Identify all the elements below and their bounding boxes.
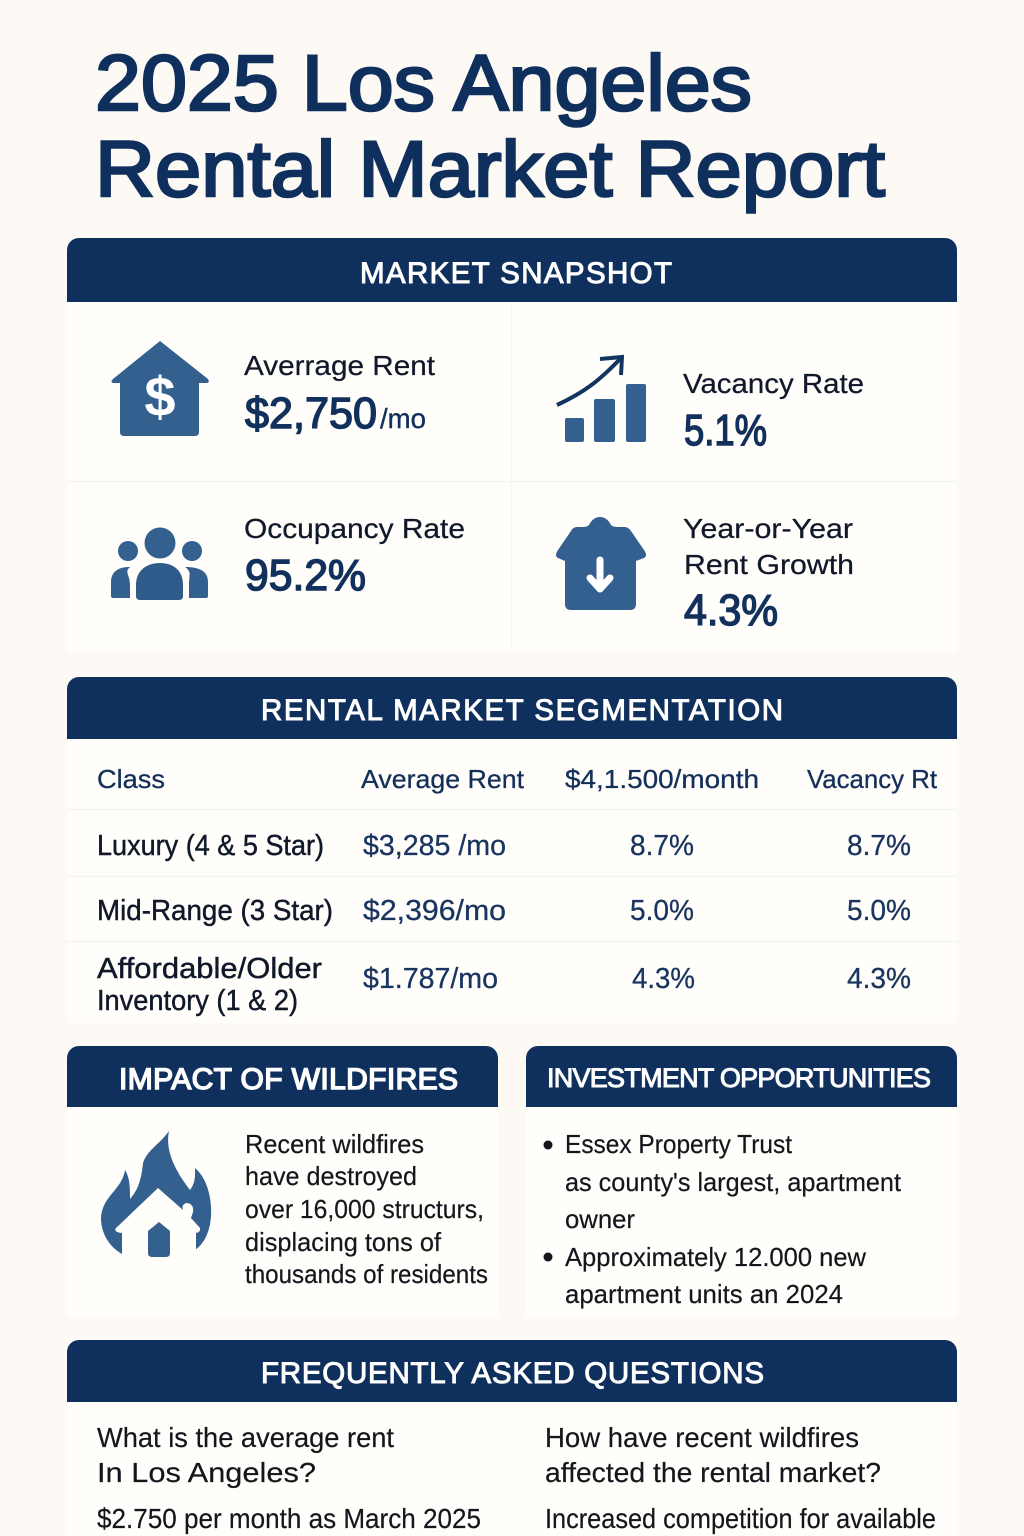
- vacancy rate stat: [683, 368, 864, 455]
- heading: investment opportunities: INVESTMENT OPPORTUNITIES: [547, 1063, 931, 1093]
- table row: mid-range: Mid-Range (3 Star): [97, 895, 333, 927]
- vacancy rate stat: Vacancy Rate: [683, 368, 864, 399]
- faq: average rent: $2.750 per month as March 2025: [97, 1503, 481, 1534]
- heading: frequently asked questions: [67, 1340, 957, 1402]
- heading: investment opportunities: [526, 1046, 957, 1107]
- table row: luxury: [97, 830, 911, 862]
- table row: mid-range: 5.0%: [847, 895, 911, 927]
- bullet: new apartment units: apartment units an 2024: [565, 1279, 843, 1309]
- table row: affordable: [97, 953, 911, 1017]
- table header row: $4,1.500/month: [565, 764, 759, 794]
- wildfire text block: over 16,000 structurs,: [245, 1194, 484, 1224]
- heading: impact of wildfires: [67, 1046, 498, 1107]
- average rent stat: [244, 350, 435, 438]
- icon: house on fire: [101, 1131, 211, 1258]
- faq: average rent: What is the average rent: [97, 1422, 394, 1453]
- bullet: new apartment units: Approximately 12.000 new: [565, 1242, 866, 1272]
- faq: wildfires effect: [545, 1422, 936, 1534]
- icon: group of people: [111, 528, 208, 600]
- table row: mid-range: $2,396/mo: [363, 895, 506, 927]
- heading: impact of wildfires: IMPACT OF WILDFIRES: [119, 1063, 458, 1096]
- icon: house with dollar sign: $: [144, 365, 176, 428]
- table row: affordable: $1.787/mo: [363, 963, 498, 995]
- year-over-year rent growth stat: [683, 513, 854, 635]
- bullet: new apartment units: [544, 1242, 866, 1309]
- panel: market snapshot: [67, 238, 957, 652]
- table row: affordable: 4.3%: [847, 963, 911, 995]
- year-over-year rent growth stat: Year-or-Year: [683, 513, 853, 544]
- table row: affordable: Inventory (1 & 2): [97, 985, 298, 1017]
- bullet: essex property trust: as county's largest, apartment: [565, 1167, 902, 1197]
- bullet: essex property trust: [544, 1129, 902, 1234]
- table header row: [97, 764, 938, 794]
- faq: wildfires effect: How have recent wildfires: [545, 1422, 859, 1453]
- occupancy rate stat: [244, 513, 465, 600]
- panel: frequently asked questions: [67, 1340, 957, 1536]
- icon: house with dollar sign: [112, 341, 209, 436]
- table row: affordable: Affordable/Older: [97, 953, 322, 985]
- table row: luxury: 8.7%: [630, 830, 694, 862]
- faq: wildfires effect: affected the rental market?: [545, 1457, 881, 1488]
- table row: luxury: $3,285 /mo: [363, 830, 506, 862]
- wildfire text block: Recent wildfires: [245, 1129, 424, 1159]
- average rent stat: $2,750: [245, 389, 377, 438]
- vacancy rate stat: 5.1%: [684, 406, 767, 455]
- title: [95, 38, 885, 213]
- wildfire text block: [245, 1129, 488, 1289]
- heading: market snapshot: [67, 238, 957, 302]
- icon: house with down arrow: [556, 517, 646, 610]
- icon: bar chart with rising arrow: [557, 357, 646, 442]
- heading: rental market segmentation: RENTAL MARKET SEGMENTATION: [261, 694, 783, 727]
- table row: affordable: 4.3%: [632, 963, 695, 995]
- bullet: essex property trust: owner: [565, 1204, 635, 1234]
- average rent stat: Averrage Rent: [244, 350, 435, 381]
- table row: mid-range: 5.0%: [630, 895, 694, 927]
- wildfire text block: have destroyed: [245, 1161, 417, 1191]
- year-over-year rent growth stat: Rent Growth: [684, 549, 854, 580]
- heading: frequently asked questions: FREQUENTLY ASKED QUESTIONS: [261, 1357, 764, 1390]
- panel: rental market segmentation: [67, 677, 957, 1023]
- bullet: essex property trust: Essex Property Trust: [565, 1129, 793, 1159]
- heading: market snapshot: MARKET SNAPSHOT: [360, 257, 672, 290]
- title: Rental Market Report: [95, 124, 885, 213]
- occupancy rate stat: 95.2%: [245, 551, 366, 600]
- table row: mid-range: [97, 895, 911, 927]
- wildfire text block: displacing tons of: [245, 1227, 442, 1257]
- faq: average rent: [97, 1422, 481, 1534]
- table row: luxury: Luxury (4 & 5 Star): [97, 830, 324, 862]
- heading: rental market segmentation: [67, 677, 957, 739]
- table header row: Average Rent: [361, 764, 525, 794]
- year-over-year rent growth stat: 4.3%: [684, 586, 778, 635]
- table row: luxury: 8.7%: [847, 830, 911, 862]
- average rent stat: /mo: [380, 403, 426, 434]
- occupancy rate stat: Occupancy Rate: [244, 513, 465, 544]
- table header row: Vacancy Rt: [807, 764, 938, 794]
- title: 2025 Los Angeles: [95, 38, 752, 127]
- table header row: Class: [97, 764, 165, 794]
- faq: average rent: In Los Angeles?: [97, 1457, 316, 1488]
- panel: impact of wildfires: [67, 1046, 498, 1317]
- faq: wildfires effect: Increased competition for available: [545, 1503, 936, 1534]
- wildfire text block: thousands of residents: [245, 1259, 488, 1289]
- panel: investment opportunities: [526, 1046, 957, 1317]
